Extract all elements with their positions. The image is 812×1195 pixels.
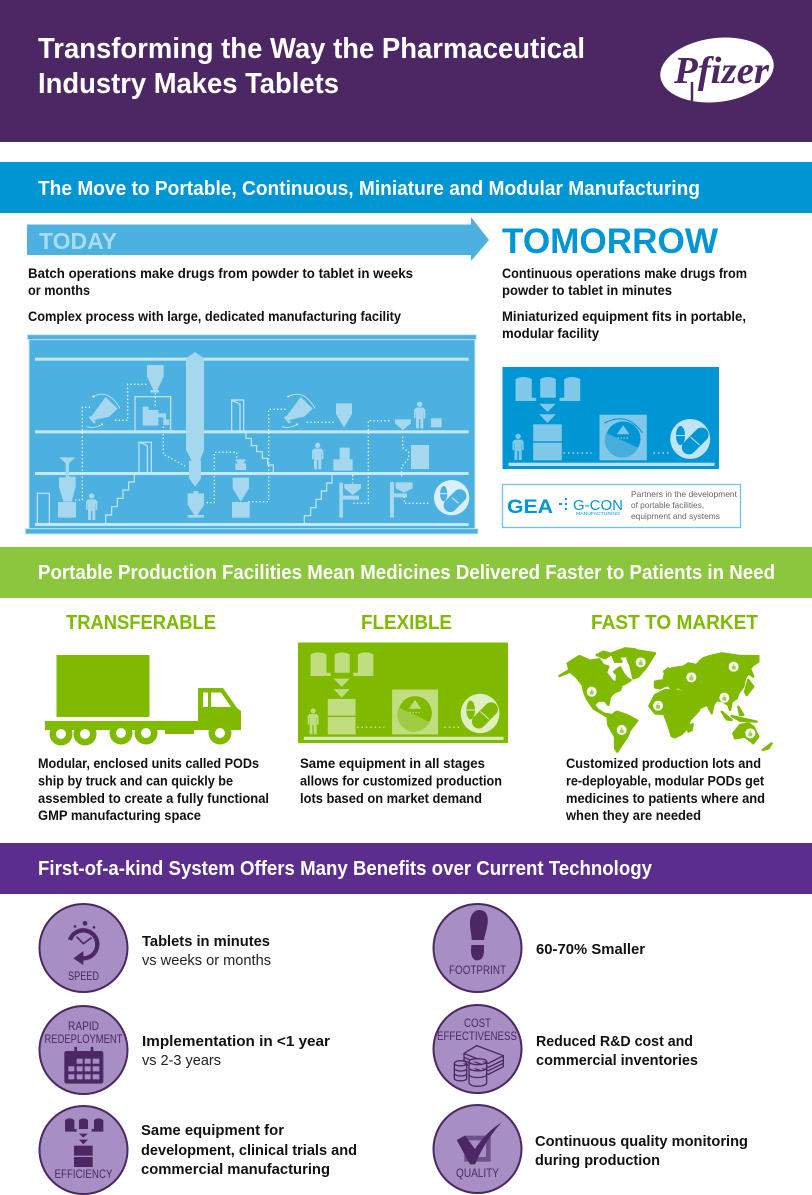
panel: miniature portable facility — [502, 367, 719, 469]
text: transferable: assembled to create a fully functional — [38, 791, 269, 806]
benefit text: cost: Reduced R&D cost and — [536, 1034, 693, 1050]
benefit text: redeployment: vs 2-3 years — [142, 1053, 221, 1069]
section heading: faster delivery: Portable Production Facilities Mean Medicines Delivered Faster to Patients in Need — [38, 562, 775, 584]
badge: quality — [434, 1105, 522, 1193]
text: fast to market: when they are needed — [565, 808, 701, 823]
heading: flexible: FLEXIBLE — [361, 611, 452, 634]
text: transferable: ship by truck and can quickly be — [38, 774, 233, 788]
text: tomorrow description — [502, 266, 747, 341]
partner note: equipment and systems — [631, 511, 720, 521]
partner note — [631, 489, 738, 521]
badge: rapid redeployment — [40, 1006, 128, 1094]
benefit text: efficiency — [141, 1123, 357, 1178]
arrow: today — [27, 217, 489, 261]
heading: transferable: TRANSFERABLE — [66, 611, 216, 634]
badge: footprint — [434, 904, 522, 992]
benefit text: efficiency: commercial manufacturing — [141, 1162, 330, 1178]
arrow: today: TODAY — [39, 228, 117, 254]
text: tomorrow description: modular facility — [502, 326, 599, 341]
map: world with pod locations — [559, 648, 772, 752]
benefit text: cost: commercial inventories — [536, 1053, 698, 1069]
text: tomorrow description: powder to tablet in minutes — [502, 283, 672, 298]
badge: cost effectiveness: EFFECTIVENESS — [437, 1031, 517, 1043]
badge: efficiency — [40, 1106, 128, 1194]
badge: cost effectiveness — [434, 1005, 522, 1093]
benefit text: speed: Tablets in minutes — [142, 934, 270, 950]
text: flexible: Same equipment in all stages — [300, 756, 485, 771]
text: today description — [28, 266, 413, 324]
section band: portable manufacturing — [0, 162, 812, 213]
text: today description: Batch operations make drugs from powder to tablet in weeks — [28, 266, 413, 281]
icon: tablets — [434, 480, 469, 515]
text: fast to market: Customized production lots and — [566, 756, 761, 771]
benefit text: footprint: 60-70% Smaller — [536, 942, 645, 958]
header band — [0, 0, 812, 142]
text: transferable: Modular, enclosed units called PODs — [38, 756, 259, 771]
benefit text: quality: during production — [535, 1153, 660, 1169]
heading: tomorrow: TOMORROW — [502, 222, 718, 261]
partner note: of portable facilities, — [631, 500, 704, 510]
section heading: the move: The Move to Portable, Continuous, Miniature and Modular Manufacturing — [38, 178, 700, 200]
icon: truck — [45, 655, 241, 746]
partner logos box — [502, 484, 740, 528]
benefit text: efficiency: development, clinical trials and — [141, 1143, 357, 1159]
text: flexible: lots based on market demand — [300, 791, 482, 806]
section band: benefits — [0, 843, 812, 894]
partner note: Partners in the development — [631, 489, 738, 499]
title: Transforming the Way the Pharmaceutical — [38, 33, 585, 65]
title — [38, 33, 585, 100]
badge: cost effectiveness: COST — [464, 1018, 491, 1030]
logo: Pfizer: Pfizer — [673, 50, 770, 92]
benefit text: redeployment: Implementation in <1 year — [142, 1034, 330, 1050]
text: flexible: allows for customized production — [300, 774, 502, 788]
benefit text: redeployment — [142, 1034, 330, 1069]
logo: Pfizer — [657, 31, 777, 109]
badge: footprint: FOOTPRINT — [449, 965, 506, 977]
text: today description: or months — [28, 283, 90, 298]
text: tomorrow description: Continuous operations make drugs from — [502, 266, 747, 281]
text: flexible — [300, 756, 502, 806]
benefit text: quality: Continuous quality monitoring — [535, 1134, 748, 1150]
text: fast to market — [565, 756, 765, 823]
benefit text: efficiency: Same equipment for — [141, 1123, 284, 1139]
text: today description: Complex process with large, dedicated manufacturing facility — [28, 309, 401, 324]
badge: quality: QUALITY — [456, 1168, 499, 1180]
badge: rapid redeployment: RAPID — [68, 1021, 99, 1033]
logo: G-CON: G-CON — [573, 497, 623, 514]
badge: speed — [40, 904, 128, 992]
section heading: benefits: First-of-a-kind System Offers Many Benefits over Current Technology — [38, 858, 653, 880]
benefit text: cost — [536, 1034, 698, 1069]
badge: rapid redeployment: REDEPLOYMENT — [44, 1034, 122, 1046]
diagram: batch manufacturing facility — [25, 335, 478, 534]
panel: flexible equipment — [298, 642, 508, 743]
title: Industry Makes Tablets — [38, 68, 339, 100]
benefit text: speed: vs weeks or months — [142, 953, 271, 969]
benefit text: speed — [142, 934, 271, 969]
section band: portable production — [0, 547, 812, 598]
text: tomorrow description: Miniaturized equipment fits in portable, — [502, 309, 746, 324]
logo: G-CON: MANUFACTURING — [576, 511, 621, 516]
badge: speed: SPEED — [68, 971, 99, 983]
logo: GEA: GEA — [507, 496, 553, 518]
text: fast to market: re-deployable, modular PODs get — [566, 774, 764, 788]
badge: efficiency: EFFICIENCY — [54, 1169, 113, 1181]
text: transferable — [38, 756, 269, 823]
benefit text: quality — [535, 1134, 748, 1169]
logo: G-CON — [559, 497, 623, 516]
text: fast to market: medicines to patients where and — [566, 791, 765, 806]
text: transferable: GMP manufacturing space — [38, 808, 201, 823]
heading: fast to market: FAST TO MARKET — [591, 611, 758, 634]
